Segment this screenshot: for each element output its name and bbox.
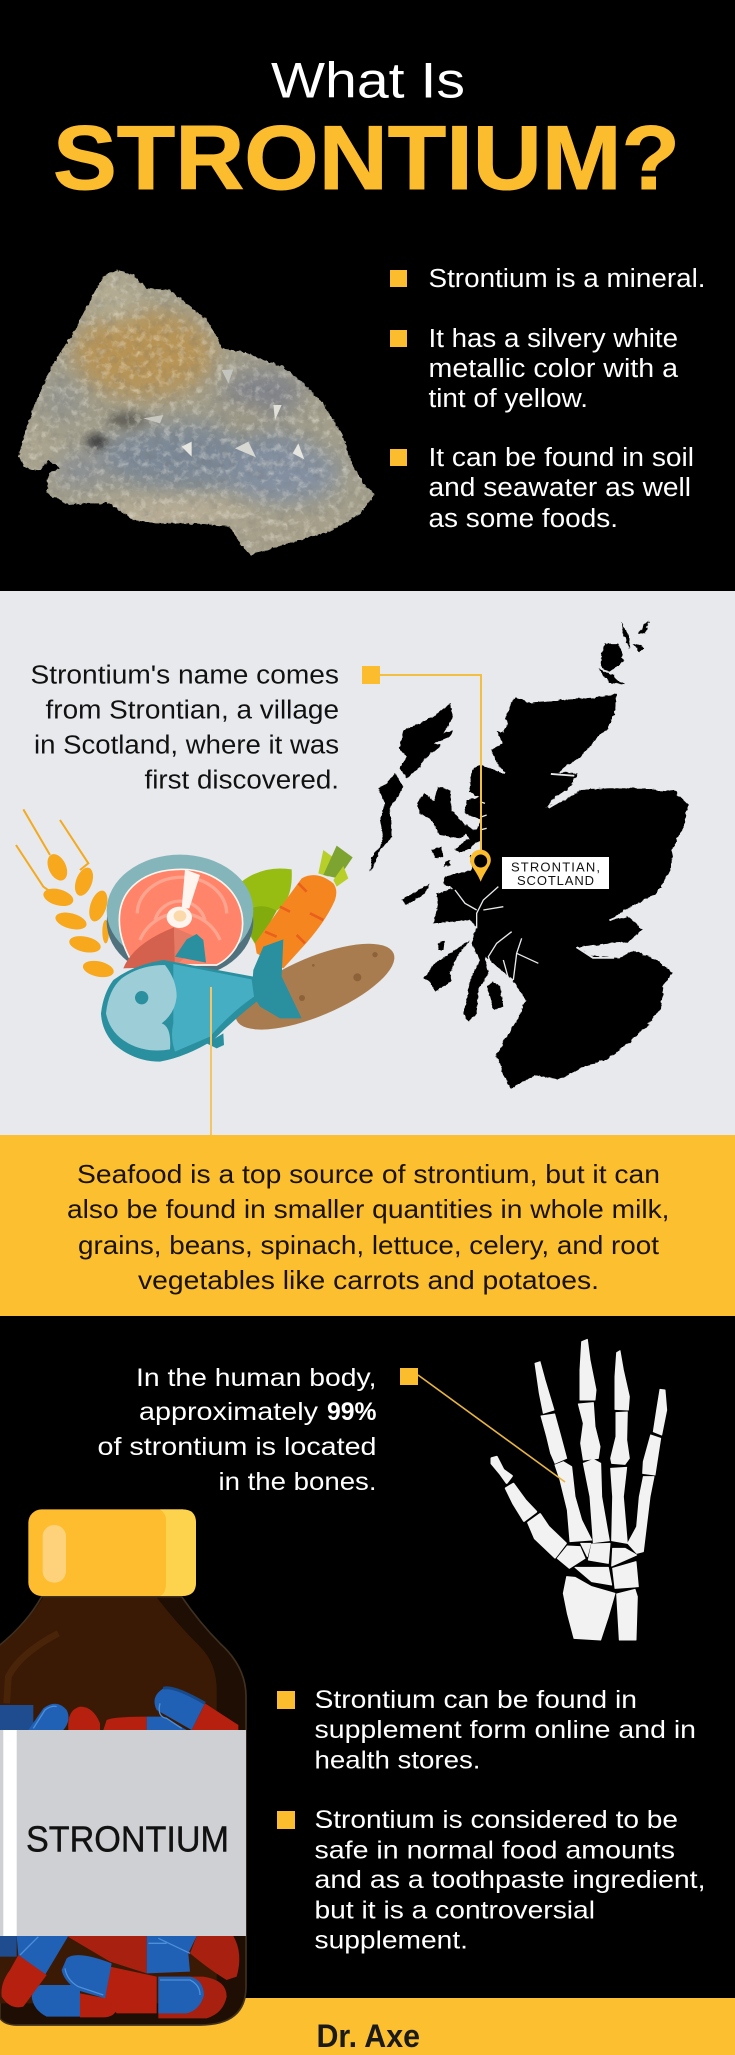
text: 99 percent in bones: In the human body, (136, 1364, 376, 1392)
text: name origin (30, 662, 339, 795)
bullet: silvery white color: tint of yellow. (428, 385, 588, 413)
brand: Dr. Axe: Dr. Axe (316, 2018, 420, 2054)
title (53, 53, 680, 209)
capsules below label (0, 1936, 239, 2018)
bullet: safety: Strontium is considered to be (314, 1806, 678, 1834)
callout connector: name origin to Strontian (362, 666, 481, 851)
bullet: supplement form (277, 1686, 696, 1774)
illustration: hand skeleton (492, 1339, 667, 1640)
bullet: safety: and as a toothpaste ingredient, (314, 1866, 706, 1894)
text: seafood and food sources: grains, beans, spinach, lettuce, celery, and root (78, 1230, 660, 1260)
bullet: silvery white color: metallic color with a (428, 355, 679, 383)
text: 99 percent in bones: of strontium is located (98, 1433, 376, 1461)
bullet: is a mineral: Strontium is a mineral. (428, 265, 706, 293)
bullet: silvery white color: It has a silvery white (428, 325, 678, 353)
bullet: soil and seawater: It can be found in soil (428, 444, 694, 472)
bottle cap (28, 1509, 196, 1596)
icon: leafy greens (242, 868, 292, 947)
connector: fish to seafood text (210, 987, 212, 1135)
bullet: safety (277, 1806, 706, 1954)
bullet list: supplement facts (277, 1686, 706, 1954)
map label: Strontian, Scotland: STRONTIAN, (511, 860, 600, 874)
text: seafood and food sources: also be found in smaller quantities in whole milk, (67, 1194, 670, 1224)
bullet: safety: safe in normal food amounts (314, 1836, 675, 1864)
panel: body and supplements (0, 1316, 735, 1998)
bones: ring finger (611, 1351, 629, 1543)
photo: strontium mineral rock (18, 270, 375, 556)
panel: intro (18, 61, 703, 556)
map: western coast and islands (370, 698, 538, 1022)
bullet: silvery white color (390, 325, 679, 413)
text: 99 percent in bones (98, 1364, 376, 1496)
panel: origin and food sources (0, 591, 735, 1135)
icon: wheat (16, 809, 115, 980)
illustration: food sources (16, 809, 405, 1062)
bullet: soil and seawater (390, 444, 694, 533)
icon: potato (225, 926, 405, 1047)
title: What Is (271, 53, 465, 109)
bottle label (0, 1730, 246, 1936)
footer band (0, 1998, 735, 2055)
bullet: supplement form: Strontium can be found in (314, 1686, 637, 1714)
bones: little finger (628, 1389, 667, 1553)
text: seafood and food sources: vegetables like carrots and potatoes. (138, 1265, 599, 1295)
bullet: safety: but it is a controversial (314, 1897, 595, 1925)
title: STRONTIUM? (53, 108, 680, 209)
text: 99 percent in bones: approximately (139, 1398, 319, 1426)
illustration: supplement bottle (0, 1509, 246, 2025)
bones: thumb (492, 1457, 566, 1557)
capsules above label (0, 1687, 238, 1730)
map: Scotland (370, 620, 688, 1088)
bullet: supplement form: supplement form online and in (314, 1716, 696, 1744)
text: name origin: from Strontian, a village (46, 697, 339, 725)
panel: seafood sources (0, 1135, 735, 1316)
icon: location pin (470, 850, 491, 882)
capsules (0, 1687, 239, 2018)
bones: middle finger (578, 1339, 609, 1543)
icon: fish (101, 934, 302, 1062)
icon: salmon steak (107, 855, 253, 978)
text: 99 percent in bones: in the bones. (218, 1468, 376, 1496)
icon: carrot (255, 846, 353, 968)
text: name origin: in Scotland, where it was (34, 732, 339, 760)
bullet list: mineral facts (390, 265, 706, 533)
bottle label: STRONTIUM (26, 1819, 229, 1860)
bones: wrist and forearm (557, 1543, 638, 1640)
text: 99 percent in bones: 99% (327, 1398, 376, 1426)
bottle body (0, 1597, 246, 2025)
bullet: soil and seawater: as some foods. (428, 505, 618, 533)
map label: Strontian, Scotland (502, 857, 609, 889)
bullet: soil and seawater: and seawater as well (428, 474, 691, 502)
map: northern and eastern mainland with northern isles (496, 620, 688, 1088)
bullet: safety: supplement. (314, 1926, 468, 1954)
text: seafood and food sources: Seafood is a top source of strontium, but it can (77, 1159, 660, 1189)
map label: Strontian, Scotland: SCOTLAND (517, 873, 594, 888)
text: seafood and food sources (67, 1159, 670, 1295)
text: name origin: Strontium's name comes (30, 662, 339, 690)
bones: index finger (535, 1362, 592, 1542)
text: name origin: first discovered. (144, 767, 339, 795)
bullet: supplement form: health stores. (314, 1746, 480, 1774)
callout connector: bones to hand (400, 1368, 565, 1482)
